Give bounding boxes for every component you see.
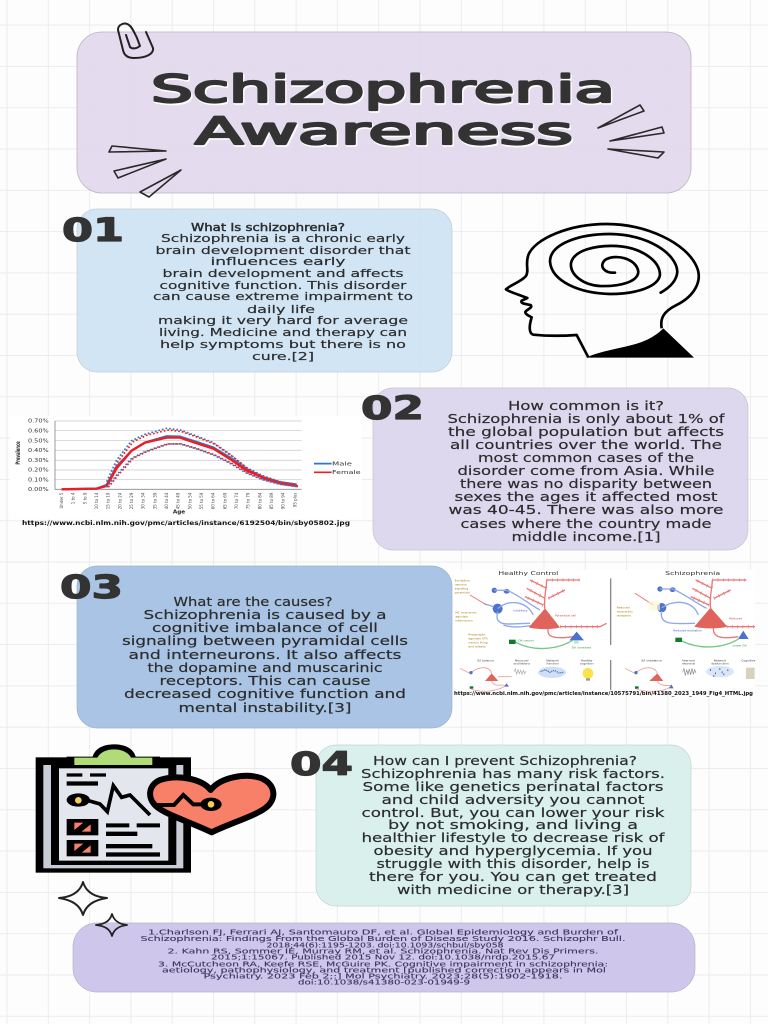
icon: small sparkle [96, 914, 127, 936]
title: Schizophrenia [151, 68, 615, 111]
line chart: prevalence by age: 45 to 49 [176, 492, 181, 509]
panel: references: Schizophrenia: Findings From the Global Burden of Disease Study 2016. Schizophr Bull. [140, 935, 626, 943]
panel: how can I prevent schizophrenia: with medicine or therapy.[3] [397, 883, 629, 897]
panel: references: 2. Kahn RS, Sommer IE, Murray RM, et al. Schizophrenia. Nat Rev Dis Primers. [168, 948, 598, 956]
panel: how can I prevent schizophrenia: and child adversity you cannot [382, 793, 645, 807]
line chart: prevalence by age: 0.70% [28, 419, 49, 425]
schizophrenia neuron: receptors [617, 613, 631, 617]
panel: what is schizophrenia: living. Medicine and therapy can [159, 326, 407, 339]
bottom strips: Healthy [581, 659, 593, 663]
panel: what are the causes [77, 566, 452, 728]
diagram source link: https://www.ncbi.nlm.nih.gov/pmc/articles/instance/10575791/bin/41380_2023_1949_Fig4_HTML.jpg [454, 691, 753, 697]
panel: how can I prevent schizophrenia: Schizophrenia has many risk factors. [361, 767, 665, 781]
schizophrenia neuron: Lower DA [733, 644, 748, 648]
line chart: prevalence by age: 85 to 89 [269, 492, 274, 509]
healthy neuron: agonism VTA [468, 637, 489, 641]
panel: how common is it: How common is it? [508, 399, 664, 413]
panel: how can I prevent schizophrenia: struggle with this disorder, help is [376, 857, 650, 871]
panel: how common is it: sexes the ages it affected most [454, 490, 718, 504]
line chart: prevalence by age: 55 to 59 [199, 492, 204, 509]
bottom strips: cognition [580, 661, 594, 665]
healthy neuron [455, 579, 607, 649]
line chart: prevalence by age: 0.40% [28, 448, 49, 454]
line chart: prevalence by age: 50 to 54 [187, 492, 192, 509]
icon: paperclip [118, 24, 153, 58]
panel: how can I prevent schizophrenia: by not smoking, and living a [388, 818, 638, 832]
line chart: prevalence by age: 20 to 24 [117, 492, 122, 509]
panel: what are the causes: Schizophrenia is caused by a [144, 608, 386, 622]
line chart: prevalence by age: Female [332, 470, 361, 476]
title: Schizophrenia [152, 70, 616, 112]
line chart: prevalence by age [10, 416, 362, 519]
icon: left burst rays [109, 146, 181, 197]
section 01 number: 01 [62, 211, 124, 249]
line chart: prevalence by age: Under 5 [59, 492, 64, 508]
panel: what is schizophrenia: What Is schizophrenia? [191, 221, 345, 234]
line chart: prevalence by age: 0.20% [28, 468, 49, 474]
panel: what is schizophrenia: brain development and affects [162, 267, 404, 280]
icon: right burst rays [598, 105, 664, 158]
panel: how common is it: all countries over the world. The [450, 438, 722, 452]
healthy neuron: agonists [455, 614, 468, 618]
line chart: prevalence by age: 0.30% [28, 458, 49, 464]
panel: what are the causes: cognitive imbalance of cell [152, 621, 378, 635]
bottom strips: dysfunction [711, 661, 729, 665]
bottom strips: E/I balance [477, 659, 494, 663]
panel: how common is it: there was no disparity between [460, 477, 712, 491]
icon: clipboard with heart [36, 744, 273, 873]
section 04 number: 04 [290, 745, 353, 783]
healthy neuron: pyramidal [455, 591, 470, 595]
panel: what is schizophrenia: can cause extreme impairment to [153, 290, 413, 303]
line chart: prevalence by age: 15 to 19 [106, 492, 111, 509]
panel: how can I prevent schizophrenia: obesity and hyperglycemia. If you [374, 844, 652, 858]
healthy neuron: Excitatory [455, 579, 470, 583]
healthy neuron: and release [468, 645, 486, 649]
diagram: healthy control vs schizophrenia neurons [453, 570, 756, 691]
healthy neuron: Pyramidal cell [555, 614, 576, 618]
panel: what is schizophrenia: brain development disorder that [156, 244, 411, 257]
panel: what are the causes: mental instability.[3] [178, 701, 352, 715]
line chart: prevalence by age: Prevalence [15, 441, 22, 465]
panel: what is schizophrenia: Schizophrenia is a chronic early [161, 232, 406, 245]
line chart: prevalence by age: 80 to 84 [257, 492, 262, 509]
bottom strips: Cognitive [741, 659, 756, 663]
line chart: prevalence by age: 25 to 29 [129, 492, 134, 509]
line chart: prevalence by age: 65 to 69 [222, 492, 227, 509]
panel: what are the causes: the dopamine and muscarinic [148, 661, 382, 675]
healthy neuron: Presynaptic [468, 633, 486, 637]
panel: how can I prevent schizophrenia: healthier lifestyle to decrease risk of [362, 831, 666, 845]
section 02 number: 02 [361, 389, 424, 427]
title panel [77, 24, 691, 197]
panel: how common is it: disorder come from Asia. While [458, 464, 714, 478]
panel: what is schizophrenia: daily life [247, 303, 315, 316]
diagram: healthy control vs schizophrenia neurons: Schizophrenia [665, 571, 720, 577]
line chart: prevalence by age: 60 to 64 [211, 492, 216, 509]
line chart: prevalence by age: 75 to 79 [246, 492, 251, 509]
panel: what is schizophrenia: influences early [210, 255, 346, 268]
panel: references: aetiology, pathophysiology, and treatment [published correction appears in Mol [162, 966, 606, 974]
panel: references: 1.Charlson FJ, Ferrari AJ, Santomauro DF, et al. Global Epidemiology and Burden of [148, 928, 619, 936]
panel: how can I prevent schizophrenia: there for you. You can get treated [369, 870, 657, 884]
panel: how can I prevent schizophrenia: Some like genetics perinatal factors [362, 780, 664, 794]
line chart: prevalence by age: 95 plus [292, 493, 297, 507]
healthy neuron: DA neuron [518, 639, 534, 643]
panel: references: doi:10.1038/s41380-023-01949-9 [298, 978, 470, 986]
section 03 number: 03 [60, 568, 123, 606]
title: Awareness [195, 110, 573, 153]
panel: how can I prevent schizophrenia [316, 745, 691, 906]
line chart: prevalence by age: 40 to 44 [164, 492, 169, 509]
panel: how common is it: Schizophrenia is only about 1% of [448, 412, 726, 426]
diagram: healthy control vs schizophrenia neurons: Healthy Control [498, 571, 558, 577]
line chart: prevalence by age: 35 to 39 [152, 492, 157, 509]
panel: what is schizophrenia: help symptoms but there is no [160, 338, 406, 351]
panel: what are the causes: and interneurons. It also affects [128, 648, 402, 662]
line chart: prevalence by age: Male [332, 461, 353, 467]
healthy neuron: neuron firing [468, 641, 488, 645]
panel: how common is it: most common cases of the [478, 451, 694, 465]
schizophrenia neuron: muscarinic [617, 609, 633, 613]
title: Awareness [196, 112, 574, 154]
line chart: prevalence by age: 30 to 34 [141, 492, 146, 509]
panel: how common is it [373, 388, 748, 550]
bottom strips: Aberrant [682, 659, 696, 663]
line chart: prevalence by age: 5 to 9 [82, 492, 87, 504]
panel: how can I prevent schizophrenia: How can I prevent Schizophrenia? [373, 754, 637, 768]
panel: references: Psychiatry. 2023 Feb 2;:] Mol Psychiatry. 2023;28(5):1902-1918. [204, 972, 562, 980]
panel: what are the causes: signaling between pyramidal cells [122, 634, 408, 648]
panel: references [73, 923, 695, 992]
title [151, 68, 616, 154]
line chart: prevalence by age: 0.00% [28, 487, 49, 493]
panel: what are the causes: What are the causes? [174, 595, 332, 609]
bottom strips: Neuronal [515, 659, 529, 663]
line chart: prevalence by age: 0.10% [28, 477, 49, 483]
line chart: prevalence by age: 10 to 14 [94, 492, 99, 509]
bottom strips: Network [714, 659, 726, 663]
schizophrenia neuron: Reduced [729, 616, 742, 620]
line chart: prevalence by age: 90 to 94 [281, 492, 286, 509]
healthy neuron: DA increases [572, 645, 591, 649]
bottom strips: function [547, 661, 559, 665]
panel: what is schizophrenia [77, 209, 452, 372]
panel: what is schizophrenia: cure.[2] [252, 350, 314, 363]
panel: how common is it: the global population but affects [448, 425, 724, 439]
line chart: prevalence by age: 0.50% [28, 438, 49, 444]
icon: large sparkle [59, 882, 107, 915]
panel: what are the causes: receptors. This can cause [160, 674, 370, 688]
healthy neuron: neurons [455, 583, 467, 587]
line chart: prevalence by age: 70 to 74 [234, 492, 239, 509]
panel: how common is it: was 40-45. There was also more [448, 503, 724, 517]
icon: head with spiral [506, 224, 699, 358]
panel: how common is it: middle income.[1] [512, 530, 660, 544]
line chart: prevalence by age: 1 to 4 [71, 492, 76, 504]
panel: references: 2015;1:15067. Published 2015 Nov 12. doi:10.1038/nrdp.2015.67 [211, 954, 555, 962]
bottom strips: Network [546, 659, 559, 663]
healthy neuron: interneuron [455, 618, 473, 622]
panel: what is schizophrenia: cognitive function. This disorder [160, 279, 407, 292]
panel: references: 3. McCutcheon RA, Keefe RSE, McGuire PK. Cognitive impairment in schizophrenia: [158, 960, 608, 968]
schizophrenia neuron: Reduced excitation [673, 629, 702, 633]
healthy neuron: M1 muscarinic [455, 610, 477, 614]
panel: what is schizophrenia: making it very hard for average [158, 314, 408, 327]
panel: how can I prevent schizophrenia: control. But, you can lower your risk [362, 806, 665, 820]
panel: what are the causes: decreased cognitive function and [124, 687, 406, 701]
bottom strips: oscillations [513, 661, 530, 665]
bottom strips: neuronal [682, 661, 695, 665]
healthy neuron: signaling [455, 587, 468, 591]
line chart: prevalence by age: 0.60% [28, 428, 49, 434]
healthy neuron: Inhibitory [513, 609, 528, 613]
schizophrenia neuron [617, 580, 755, 648]
line chart: prevalence by age: Age [173, 509, 185, 515]
chart source link: https://www.ncbi.nlm.nih.gov/pmc/articles/instance/6192504/bin/sby05802.jpg [22, 520, 350, 527]
schizophrenia neuron: Reduced [617, 605, 630, 609]
panel: references: 2018;44(6):1195-1203. doi:10.1093/schbul/sby058 [266, 942, 504, 950]
bottom strips [460, 659, 756, 691]
panel: how common is it: cases where the country made [460, 517, 712, 531]
bottom strips: E/I imbalance [642, 659, 662, 663]
